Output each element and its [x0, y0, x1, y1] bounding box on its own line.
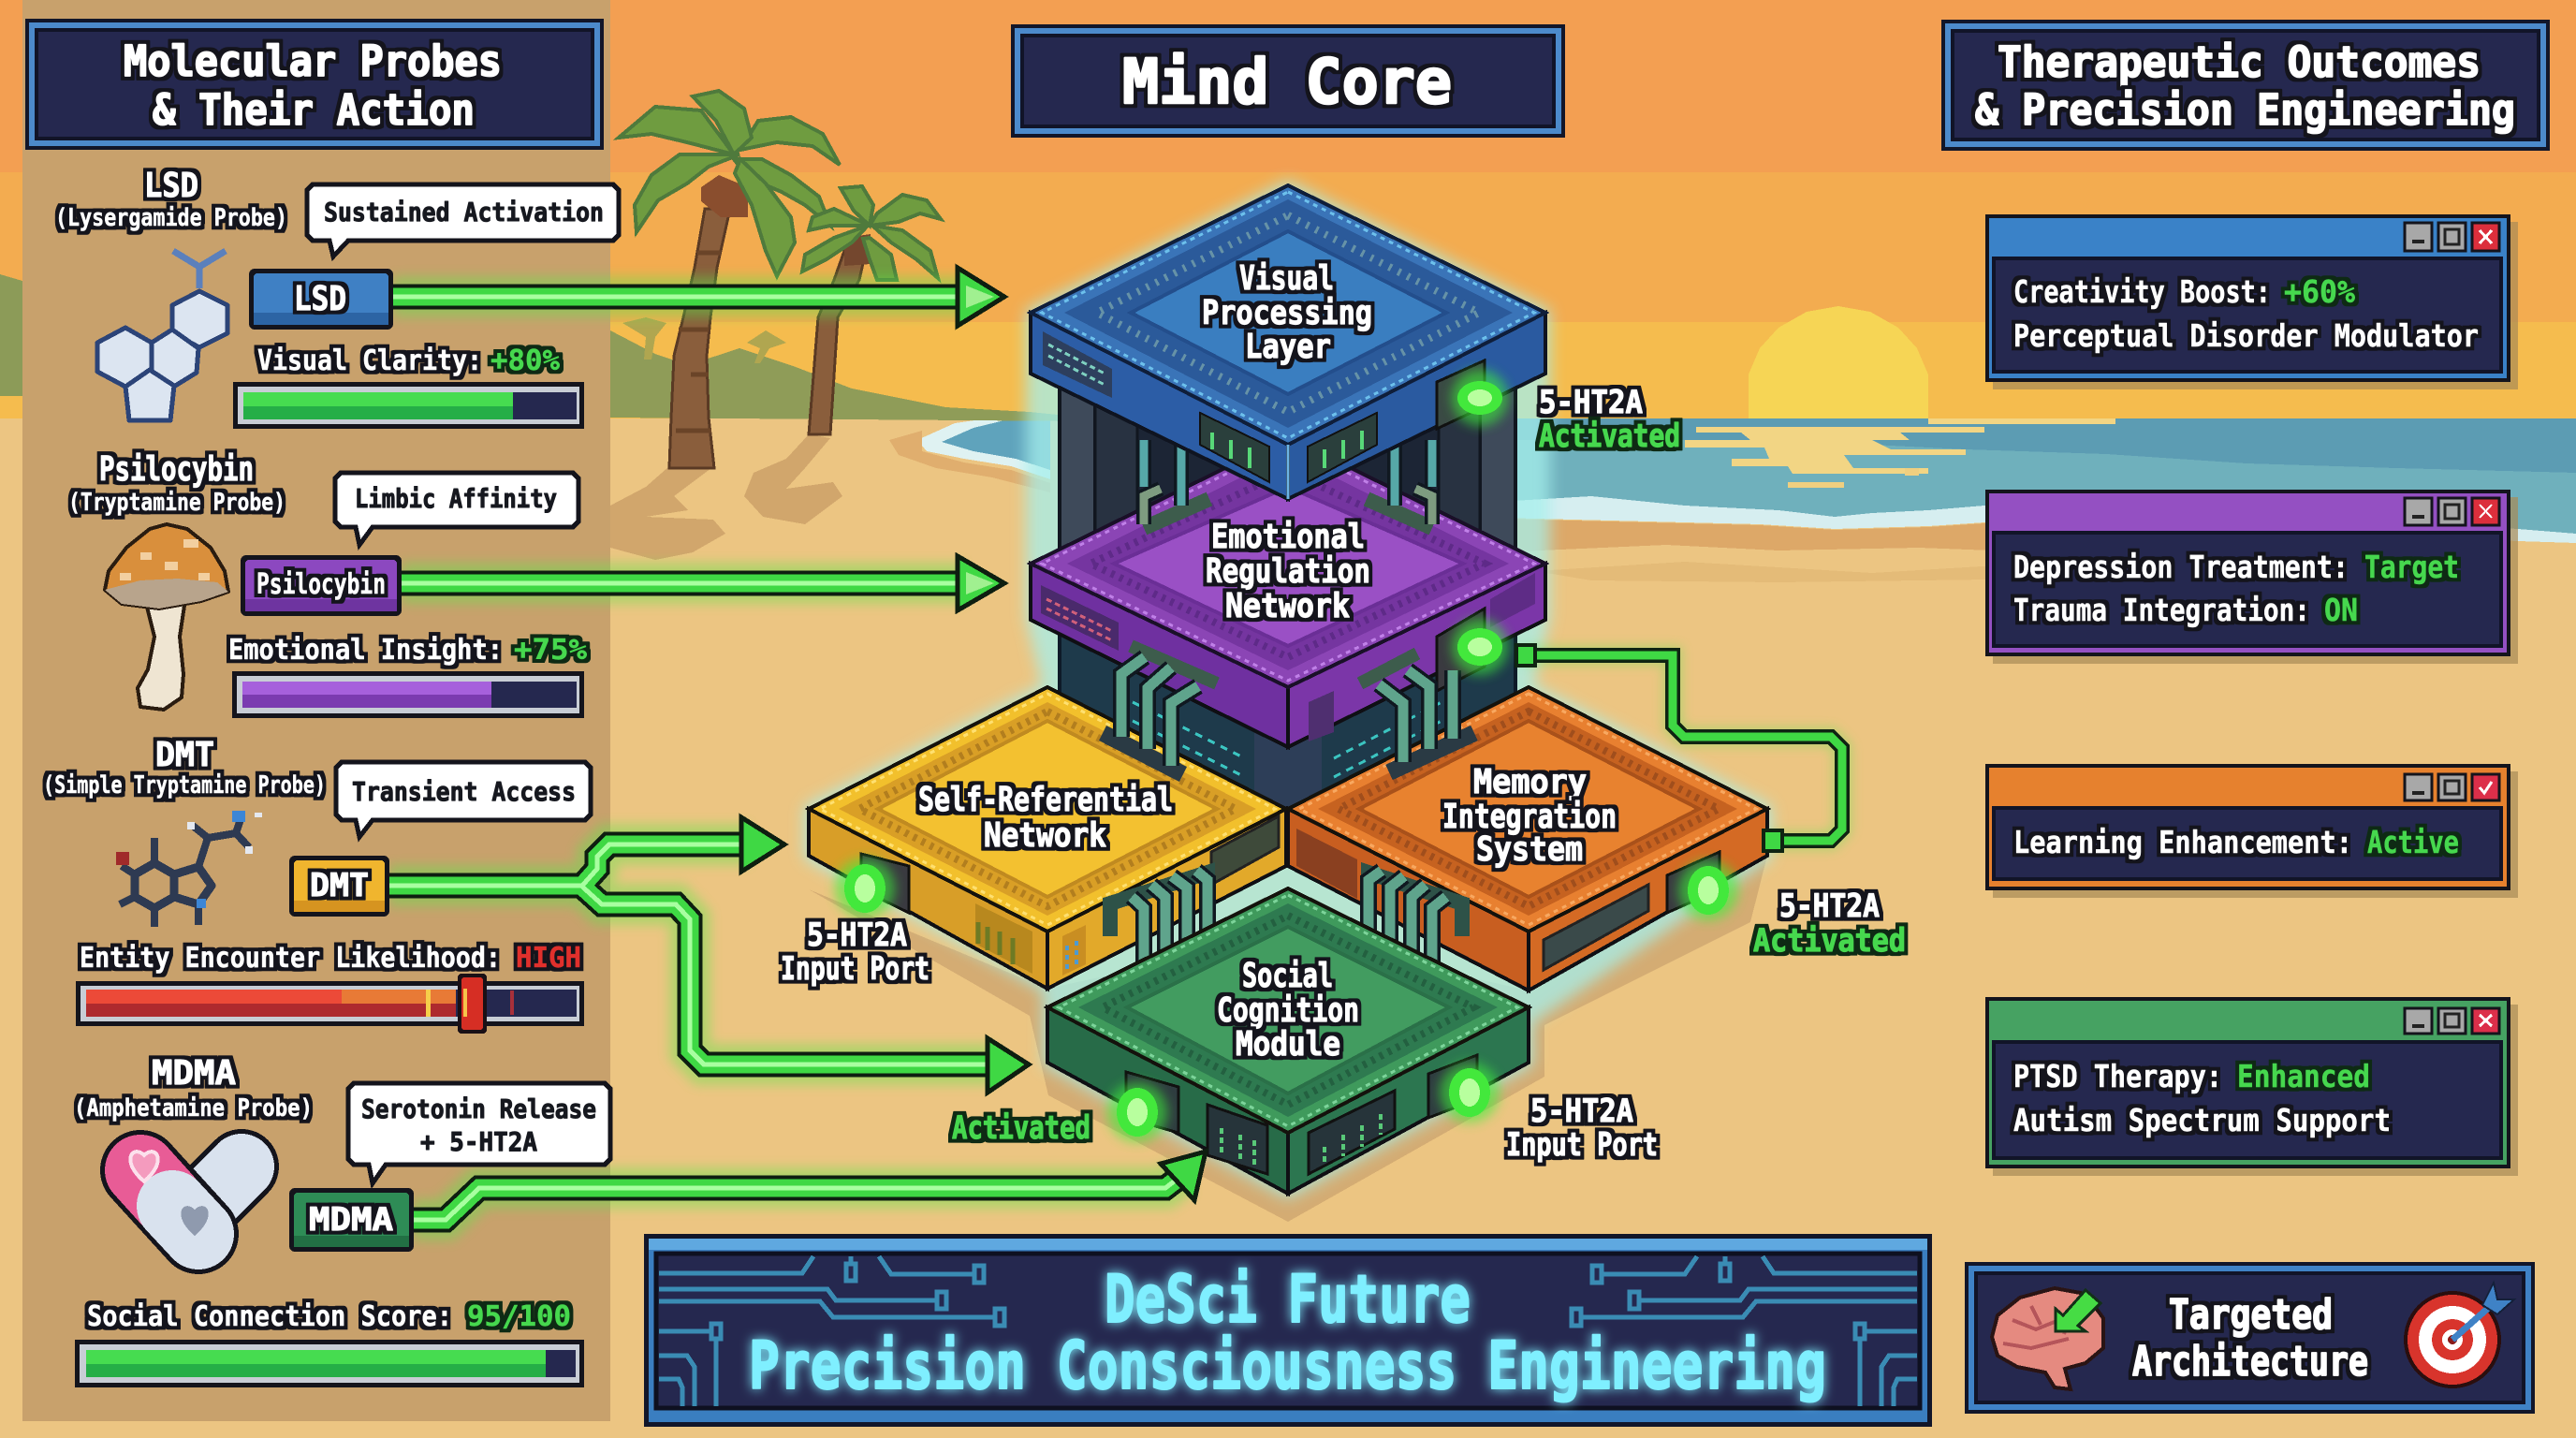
- cyan glow outline of stack: [809, 185, 1767, 1194]
- window: depression treatment: Trauma Integration:: [2013, 592, 2310, 628]
- probe: DMT: [43, 736, 591, 1034]
- heading: molecular probes: & Their Action: [153, 85, 475, 135]
- icon: brain with arrow: [1992, 1288, 2103, 1389]
- ocean water: [889, 417, 2576, 582]
- label: memory integration system: [1442, 763, 1617, 869]
- panel: left column backdrop: [22, 0, 610, 1421]
- window buttons: [2405, 498, 2499, 525]
- label: visual clarity: +80%: [490, 345, 560, 377]
- window buttons: [2405, 223, 2499, 251]
- panel: desci future banner: [644, 1234, 1932, 1427]
- window: learning enhancement: Learning Enhancement:: [2013, 824, 2352, 860]
- label: green input port: Input Port: [1506, 1126, 1658, 1164]
- arrow: MDMA to social cognition module: [414, 1152, 1206, 1220]
- central isometric stack: [809, 185, 1842, 1222]
- label: memory integration system: Integration: [1442, 798, 1617, 836]
- label: orange port activated: 5-HT2A: [1779, 888, 1880, 925]
- callout: serotonin release: + 5-HT2A: [420, 1126, 537, 1157]
- label: emotional insight: +75%: [514, 634, 587, 667]
- banner heading: DeSci Future: [1105, 1261, 1471, 1338]
- block: visual processing layer (blue): [1031, 185, 1545, 499]
- window: depression treatment: [1985, 490, 2518, 664]
- arrow: LSD to visual processing layer: [393, 268, 1004, 326]
- block: emotional regulation network (purple): [1031, 437, 1545, 747]
- block: social cognition module (green): [1047, 888, 1529, 1194]
- label: social connection score: Social Connection Score:: [87, 1300, 452, 1333]
- probe: psilocybin: (Tryptamine Probe): [68, 489, 285, 517]
- palm tree shadows on the sand: [610, 434, 842, 560]
- banner subheading: Precision Consciousness Engineering: [749, 1328, 1826, 1404]
- label: social cognition module: [1217, 957, 1359, 1064]
- panel: targeted architecture: Architecture: [2132, 1338, 2368, 1386]
- ground shadow: [809, 856, 1767, 1222]
- palm tree: small: [802, 186, 941, 434]
- probe: LSD: (Lysergamide Probe): [55, 204, 287, 232]
- label: emotional regulation network: Emotional: [1211, 518, 1365, 556]
- probe: MDMA: (Amphetamine Probe): [74, 1094, 313, 1123]
- label: self-referential network: Network: [984, 816, 1106, 855]
- label: social connection score: 95/100: [467, 1300, 571, 1333]
- label: entity encounter likelihood: Entity Encounter Likelihood:: [80, 942, 501, 975]
- label: emotional regulation network: Network: [1225, 587, 1350, 625]
- window: PTSD therapy: [1985, 997, 2518, 1176]
- icons: glowing 5-HT2A receptor ports: [835, 370, 1738, 1142]
- icon: target with dart: [2406, 1283, 2514, 1387]
- label: emotional insight: Emotional Insight:: [228, 634, 503, 667]
- label: visual processing layer: [1202, 259, 1372, 366]
- probe: psilocybin: Psilocybin: [99, 450, 254, 489]
- icon: LSD molecule: [97, 251, 227, 420]
- window: creativity boost: Creativity Boost:: [2013, 273, 2271, 310]
- window: creativity boost: [1985, 214, 2518, 389]
- probe: DMT: (Simple Tryptamine Probe): [43, 771, 326, 800]
- panel: targeted architecture: [1965, 1262, 2535, 1414]
- label: blue port activated: [1539, 384, 1680, 455]
- callout: serotonin release: Serotonin Release: [361, 1093, 596, 1124]
- window: learning enhancement: Active: [2367, 824, 2459, 860]
- probe: LSD: LSD: [144, 167, 198, 205]
- label: green input port: 5-HT2A: [1530, 1093, 1633, 1130]
- label: yellow input port: 5-HT2A: [807, 917, 907, 954]
- label: visual processing layer: Processing: [1202, 294, 1372, 332]
- panel: targeted architecture: Targeted: [2169, 1291, 2333, 1339]
- probe: MDMA: MDMA: [152, 1054, 236, 1093]
- chip: psilocybin: Psilocybin: [256, 568, 386, 601]
- heading: therapeutic outcomes: [1941, 20, 2550, 151]
- label: orange port activated: [1753, 888, 1906, 960]
- label: orange port activated: Activated: [1753, 922, 1906, 960]
- window buttons: [2405, 774, 2499, 800]
- icon: MDMA pills: [130, 1152, 242, 1236]
- probe: psilocybin: [68, 450, 587, 718]
- title: Mind Core: Mind Core: [1122, 46, 1452, 118]
- bar: emotional insight 75%: [232, 671, 584, 718]
- window: depression treatment: Target: [2364, 549, 2459, 585]
- chip: LSD: LSD: [294, 280, 346, 318]
- label: social cognition module: Cognition: [1217, 991, 1359, 1030]
- heading: therapeutic outcomes: Therapeutic Outcomes: [1998, 37, 2481, 87]
- label: emotional regulation network: Regulation: [1206, 552, 1370, 591]
- title: Mind Core: [1011, 24, 1565, 138]
- window: creativity boost: +60%: [2284, 273, 2355, 310]
- block labels: [781, 259, 1906, 1164]
- label: memory integration system: System: [1476, 830, 1583, 869]
- window: creativity boost: Perceptual Disorder Modulator: [2013, 317, 2479, 354]
- window: PTSD therapy: Autism Spectrum Support: [2013, 1102, 2391, 1138]
- pipes: blue to purple: [1144, 440, 1432, 528]
- block: memory integration system (orange): [1288, 687, 1767, 990]
- label: emotional regulation network: [1206, 518, 1370, 625]
- arrow: DMT branching to self-referential network and social module: [389, 817, 1029, 1093]
- bar: social connection score 95: [75, 1340, 584, 1387]
- chip: MDMA: MDMA: [309, 1201, 393, 1239]
- callout: transient access: Transient Access: [352, 776, 576, 807]
- icon: setting sun: [1749, 306, 1928, 418]
- label: entity encounter likelihood: HIGH: [516, 942, 581, 975]
- window buttons: [2405, 1008, 2499, 1034]
- icon: DMT molecule: [116, 811, 262, 927]
- callout: limbic affinity: [335, 473, 578, 545]
- chip: DMT: [289, 856, 389, 917]
- window: PTSD therapy: Enhanced: [2237, 1058, 2370, 1094]
- callout: sustained activation: [307, 184, 619, 257]
- chip: DMT: DMT: [310, 867, 369, 904]
- chip: LSD: [249, 269, 393, 330]
- label: green input port: [1506, 1093, 1658, 1164]
- pipes: yellow and orange to social module: [1110, 871, 1462, 989]
- circuit traces left: [659, 1256, 1004, 1406]
- label: social cognition module: Module: [1236, 1025, 1340, 1064]
- probe: MDMA: [74, 1054, 610, 1387]
- chip: MDMA: [289, 1188, 414, 1252]
- bar: entity encounter likelihood high: [76, 974, 584, 1034]
- callout: serotonin release: [348, 1083, 610, 1183]
- window: depression treatment: Depression Treatment:: [2013, 549, 2349, 585]
- label: social cognition module: Social: [1242, 957, 1333, 995]
- pillars: between blue and purple: [1060, 360, 1515, 562]
- label: green port activated: Activated: [952, 1109, 1090, 1147]
- circuit traces right: [1572, 1256, 1917, 1406]
- block: self-referential network (yellow): [809, 687, 1286, 989]
- chip: psilocybin: [241, 555, 402, 616]
- arrow: purple port to orange port connector: [1516, 645, 1842, 851]
- probe: LSD: [55, 167, 619, 429]
- lower dark core block: [1060, 609, 1515, 813]
- window: learning enhancement: [1985, 764, 2518, 898]
- label: visual clarity: Visual Clarity:: [257, 345, 482, 377]
- window: PTSD therapy: PTSD Therapy:: [2013, 1058, 2222, 1094]
- label: memory integration system: Memory: [1473, 763, 1587, 801]
- label: visual processing layer: Layer: [1245, 328, 1331, 366]
- slider handle: [458, 974, 487, 1034]
- arrow: psilocybin to emotional regulation network: [402, 556, 1004, 610]
- heading: molecular probes: [25, 19, 604, 150]
- label: yellow input port: [781, 917, 929, 988]
- bar: visual clarity 80%: [233, 382, 584, 429]
- callout: transient access: [336, 762, 591, 837]
- palm tree: large: [619, 91, 840, 468]
- label: visual processing layer: Visual: [1239, 259, 1334, 298]
- label: self-referential network: [918, 781, 1173, 855]
- icon: mushroom: [105, 524, 228, 710]
- heading: therapeutic outcomes: & Precision Engineering: [1975, 85, 2515, 135]
- label: self-referential network: Self-Referential: [918, 781, 1173, 819]
- distant hills: [0, 274, 1086, 421]
- heading: molecular probes: Molecular Probes: [124, 37, 502, 86]
- label: yellow input port: Input Port: [781, 950, 929, 988]
- callout: sustained activation: Sustained Activation: [324, 197, 604, 227]
- label: blue port activated: Activated: [1539, 418, 1680, 455]
- window: depression treatment: ON: [2324, 592, 2358, 628]
- probe: DMT: DMT: [155, 736, 214, 774]
- label: blue port activated: 5-HT2A: [1539, 384, 1643, 421]
- callout: limbic affinity: Limbic Affinity: [355, 483, 557, 514]
- pipes: purple to yellow and orange: [1103, 646, 1474, 774]
